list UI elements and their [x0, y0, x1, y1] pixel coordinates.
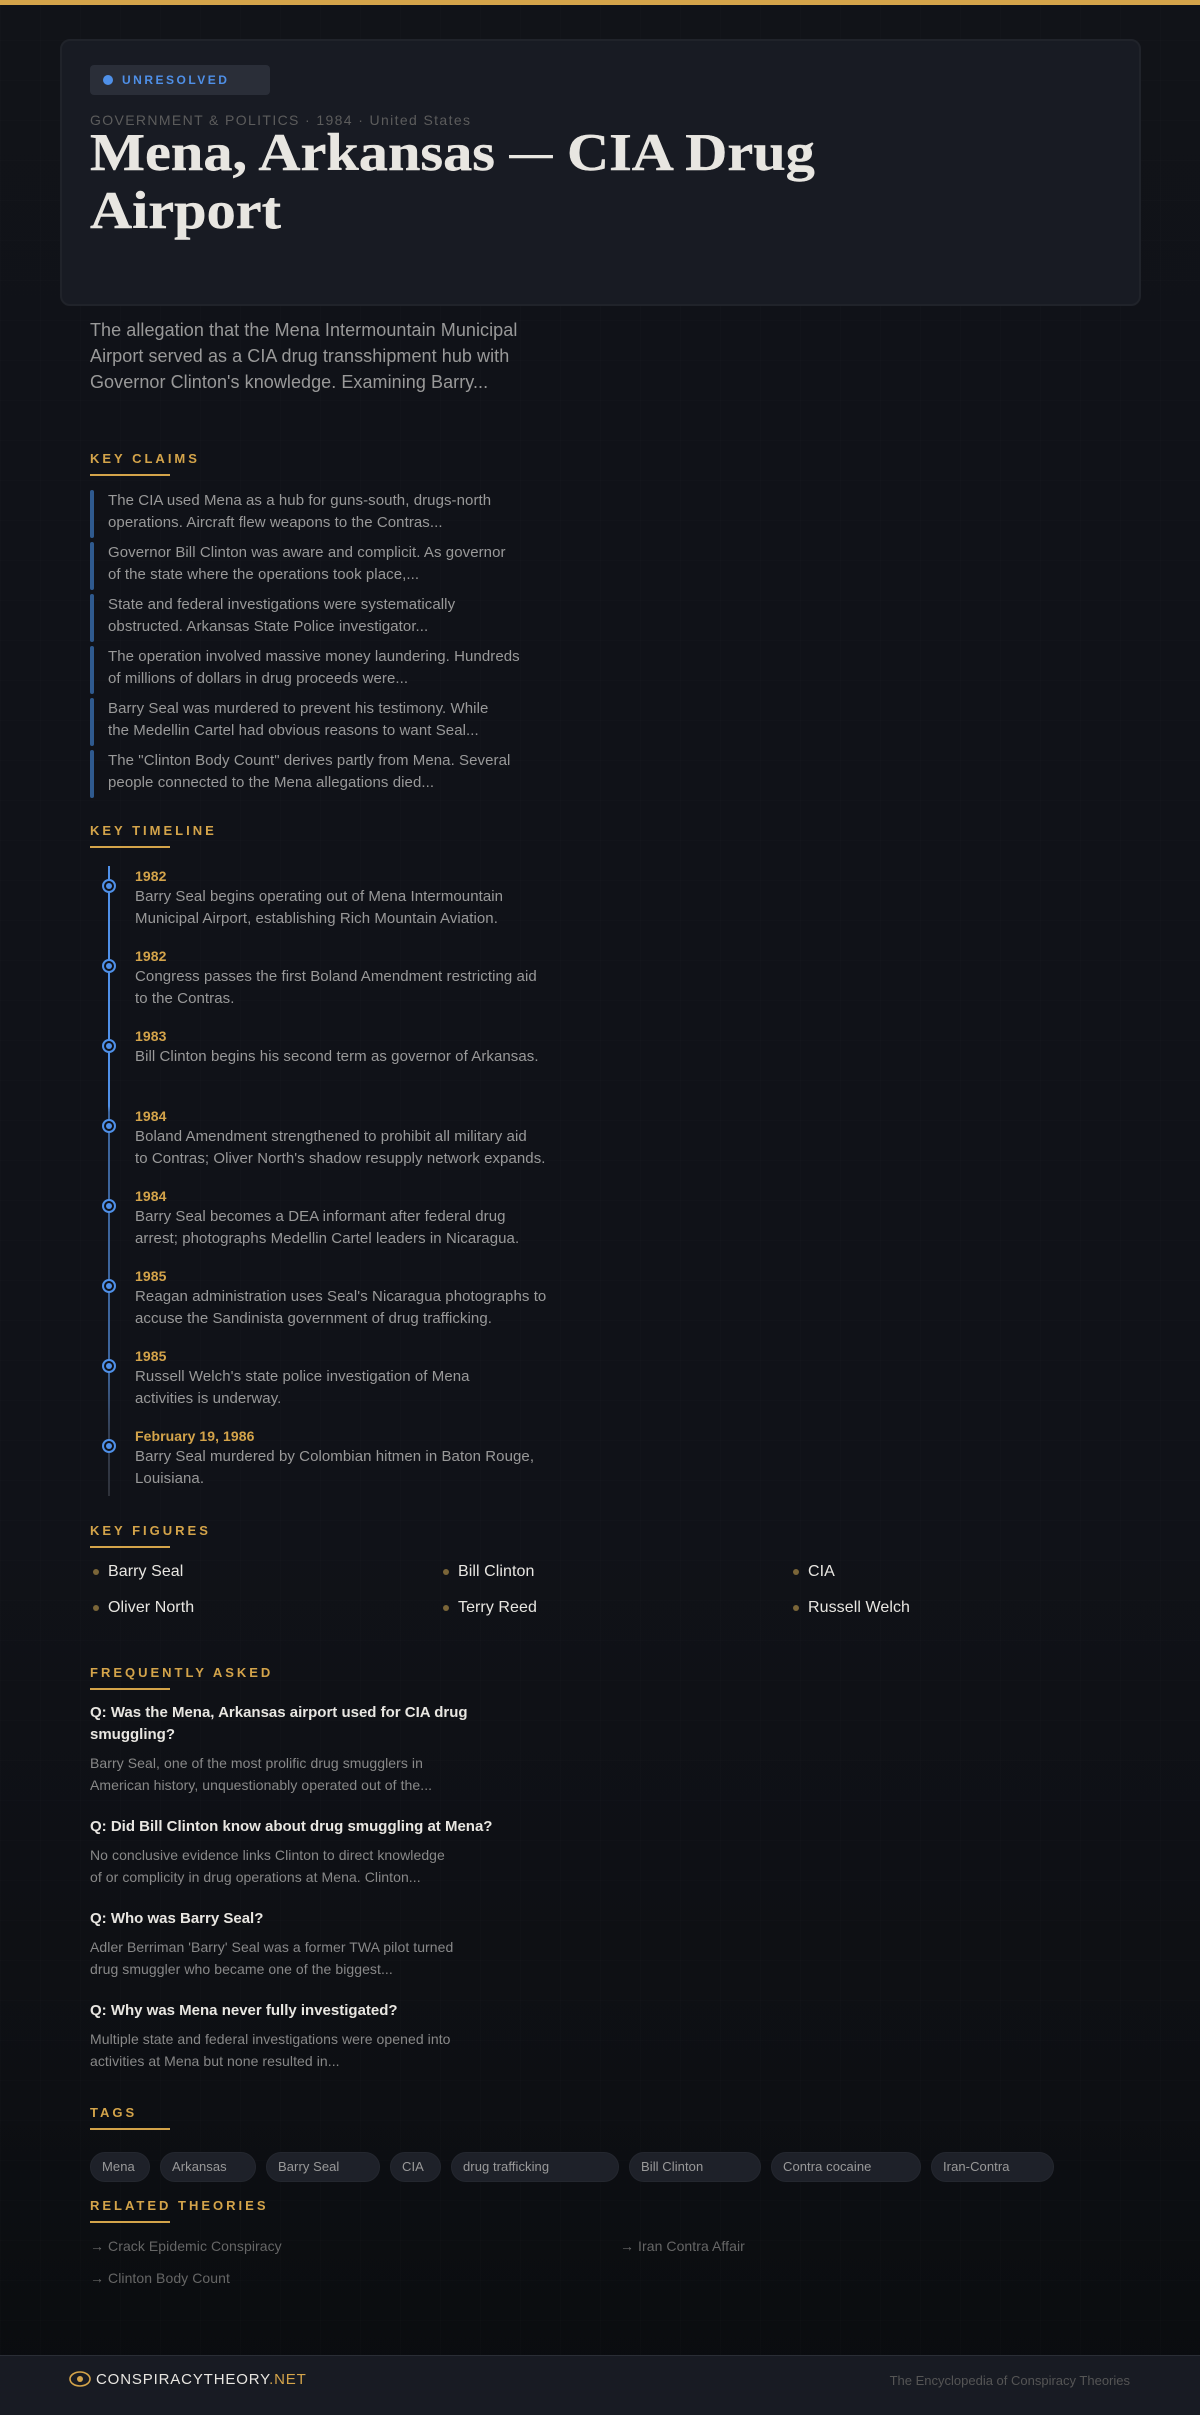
intro text: The allegation that the Mena Intermountain Municipal: [90, 320, 517, 340]
event 1984 DEA: Barry Seal becomes a DEA informant after federal drug: [135, 1208, 506, 1225]
panel: key figures: [93, 1563, 910, 1616]
event 1986: Barry Seal murdered by Colombian hitmen in Baton Rouge,: [135, 1448, 534, 1465]
figure: CIA: CIA: [808, 1563, 835, 1580]
panel: timeline: [102, 866, 546, 1496]
event 1985 Welch: 1985: [135, 1348, 166, 1364]
claim 2: of the state where the operations took place,...: [108, 566, 419, 583]
answer 3: [90, 1939, 453, 1977]
tag: Barry Seal: Barry Seal: [278, 2159, 339, 2174]
answer 1: [90, 1755, 432, 1793]
claim 4: The operation involved massive money laundering. Hundreds: [108, 648, 520, 665]
figure: Terry Reed: Terry Reed: [458, 1599, 537, 1616]
panel: FAQ: [90, 1704, 492, 2069]
claim 6: people connected to the Mena allegations died...: [108, 774, 434, 791]
event 1984 DEA: arrest; photographs Medellin Cartel leaders in Nicaragua.: [135, 1230, 519, 1247]
event 1982 Boland: Congress passes the first Boland Amendment restricting aid: [135, 968, 537, 985]
event 1986: [102, 1428, 534, 1487]
title: [90, 124, 815, 240]
tag: CIA: CIA: [402, 2159, 424, 2174]
figure: Barry Seal: Barry Seal: [108, 1563, 183, 1580]
intro text: Airport served as a CIA drug transshipment hub with: [90, 346, 509, 366]
heading: key figures: KEY FIGURES: [90, 1523, 211, 1538]
event 1982 Seal: 1982: [135, 868, 166, 884]
figure: Bill Clinton: Bill Clinton: [458, 1563, 534, 1580]
site wordmark: CONSPIRACYTHEORY.NET: [96, 2371, 307, 2388]
tag: Contra cocaine: Contra cocaine: [783, 2159, 871, 2174]
event 1986: February 19, 1986: [135, 1428, 254, 1444]
event 1986: Louisiana.: [135, 1470, 204, 1487]
claim 2: Governor Bill Clinton was aware and complicit. As governor: [108, 544, 506, 561]
claim 1: [90, 490, 491, 538]
event 1984 DEA: 1984: [135, 1188, 166, 1204]
event 1982 Seal: Barry Seal begins operating out of Mena Intermountain: [135, 888, 503, 905]
related link: Iran Contra: → Iran Contra Affair: [620, 2238, 745, 2254]
figure: Oliver North: Oliver North: [108, 1599, 194, 1616]
tag: drug trafficking: [451, 2152, 619, 2182]
claim 6: [90, 750, 510, 798]
tag: CIA: [390, 2152, 441, 2182]
answer 2: [90, 1847, 445, 1885]
tag: Bill Clinton: [629, 2152, 761, 2182]
heading: key timeline: KEY TIMELINE: [90, 823, 217, 838]
heading: key claims: KEY CLAIMS: [90, 451, 200, 466]
event 1983: 1983: [135, 1028, 166, 1044]
claim 5: [90, 698, 488, 746]
answer 4: [90, 2031, 451, 2069]
event 1985 Welch: activities is underway.: [135, 1390, 281, 1407]
event 1985 Welch: Russell Welch's state police investigation of Mena: [135, 1368, 470, 1385]
event 1984 Boland: 1984: [135, 1108, 166, 1124]
event 1984 Boland: to Contras; Oliver North's shadow resupply network expands.: [135, 1150, 546, 1167]
related link: Clinton Body Count: → Clinton Body Count: [90, 2270, 230, 2286]
event 1983: [102, 1028, 539, 1065]
claim 2: [90, 542, 506, 590]
question 1: smuggling?: [90, 1726, 175, 1743]
answer 2: of or complicity in drug operations at Mena. Clinton...: [90, 1869, 421, 1885]
panel: related theories: [90, 2238, 745, 2286]
category meta line: GOVERNMENT & POLITICS · 1984 · United States: [90, 112, 471, 128]
question 1: [90, 1704, 468, 1743]
event 1984 Boland: Boland Amendment strengthened to prohibit all military aid: [135, 1128, 527, 1145]
icon: status dot: [103, 75, 113, 85]
claim 1: operations. Aircraft flew weapons to the Contras...: [108, 514, 443, 531]
intro text: Governor Clinton's knowledge. Examining Barry...: [90, 372, 488, 392]
panel: tags: [90, 2152, 1054, 2182]
answer 4: activities at Mena but none resulted in...: [90, 2053, 340, 2069]
answer 1: American history, unquestionably operated out of the...: [90, 1777, 432, 1793]
answer 1: Barry Seal, one of the most prolific drug smugglers in: [90, 1755, 423, 1771]
event 1985 Reagan: [102, 1268, 546, 1327]
question 1: Q: Was the Mena, Arkansas airport used for CIA drug: [90, 1704, 468, 1721]
heading: related theories: RELATED THEORIES: [90, 2198, 268, 2213]
event 1982 Seal: Municipal Airport, establishing Rich Mountain Aviation.: [135, 910, 498, 927]
tag: drug trafficking: drug trafficking: [463, 2159, 549, 2174]
claim 4: of millions of dollars in drug proceeds were...: [108, 670, 408, 687]
badge label: UNRESOLVED: [122, 73, 229, 87]
related link: crack epidemic: → Crack Epidemic Conspiracy: [90, 2238, 282, 2254]
event 1982 Boland: 1982: [135, 948, 166, 964]
question 4: Q: Why was Mena never fully investigated?: [90, 2002, 398, 2019]
panel: hero header: [60, 39, 1141, 306]
figure: CIA: [793, 1563, 835, 1580]
tag: Barry Seal: [266, 2152, 380, 2182]
timeline spine: [108, 866, 110, 1496]
event 1982 Boland: [102, 948, 537, 1007]
status badge: [90, 65, 270, 95]
event 1984 Boland: [102, 1108, 546, 1167]
panel: key claims list: [90, 490, 520, 798]
event 1982 Seal: [102, 868, 503, 927]
tag: Arkansas: Arkansas: [172, 2159, 227, 2174]
event 1985 Reagan: 1985: [135, 1268, 166, 1284]
event 1983: Bill Clinton begins his second term as governor of Arkansas.: [135, 1048, 539, 1065]
intro text: [90, 320, 517, 392]
footer tagline: The Encyclopedia of Conspiracy Theories: [890, 2373, 1130, 2388]
tag: Iran-Contra: Iran-Contra: [943, 2159, 1010, 2174]
tag: Contra cocaine: [771, 2152, 921, 2182]
panel: footer: [0, 2355, 1200, 2415]
answer 2: No conclusive evidence links Clinton to direct knowledge: [90, 1847, 445, 1863]
event 1982 Boland: to the Contras.: [135, 990, 234, 1007]
event 1984 DEA: [102, 1188, 519, 1247]
title: Airport: [90, 182, 281, 240]
event 1985 Reagan: accuse the Sandinista government of drug trafficking.: [135, 1310, 492, 1327]
claim 3: [90, 594, 455, 642]
claim 4: [90, 646, 520, 694]
tag: Bill Clinton: Bill Clinton: [641, 2159, 703, 2174]
tag: Mena: Mena: [102, 2159, 135, 2174]
title: Mena, Arkansas — CIA Drug: [90, 124, 815, 182]
heading: frequently asked: FREQUENTLY ASKED: [90, 1665, 273, 1680]
claim 3: State and federal investigations were systematically: [108, 596, 455, 613]
question 2: Q: Did Bill Clinton know about drug smuggling at Mena?: [90, 1818, 492, 1835]
claim 5: Barry Seal was murdered to prevent his testimony. While: [108, 700, 488, 717]
answer 3: Adler Berriman 'Barry' Seal was a former TWA pilot turned: [90, 1939, 453, 1955]
event 1985 Reagan: Reagan administration uses Seal's Nicaragua photographs to: [135, 1288, 546, 1305]
figure: Russell Welch: Russell Welch: [808, 1599, 910, 1616]
claim 3: obstructed. Arkansas State Police investigator...: [108, 618, 428, 635]
top accent bar: [0, 0, 1200, 5]
claim 1: The CIA used Mena as a hub for guns-south, drugs-north: [108, 492, 491, 509]
tag: Arkansas: [160, 2152, 256, 2182]
claim 6: The "Clinton Body Count" derives partly from Mena. Several: [108, 752, 510, 769]
answer 4: Multiple state and federal investigations were opened into: [90, 2031, 451, 2047]
tag: Iran-Contra: [931, 2152, 1054, 2182]
icon: eye logo: [69, 2371, 91, 2387]
event 1985 Welch: [102, 1348, 470, 1407]
tag: Mena: [90, 2152, 150, 2182]
answer 3: drug smuggler who became one of the biggest...: [90, 1961, 393, 1977]
claim 5: the Medellin Cartel had obvious reasons to want Seal...: [108, 722, 479, 739]
heading: tags: TAGS: [90, 2105, 137, 2120]
question 3: Q: Who was Barry Seal?: [90, 1910, 263, 1927]
